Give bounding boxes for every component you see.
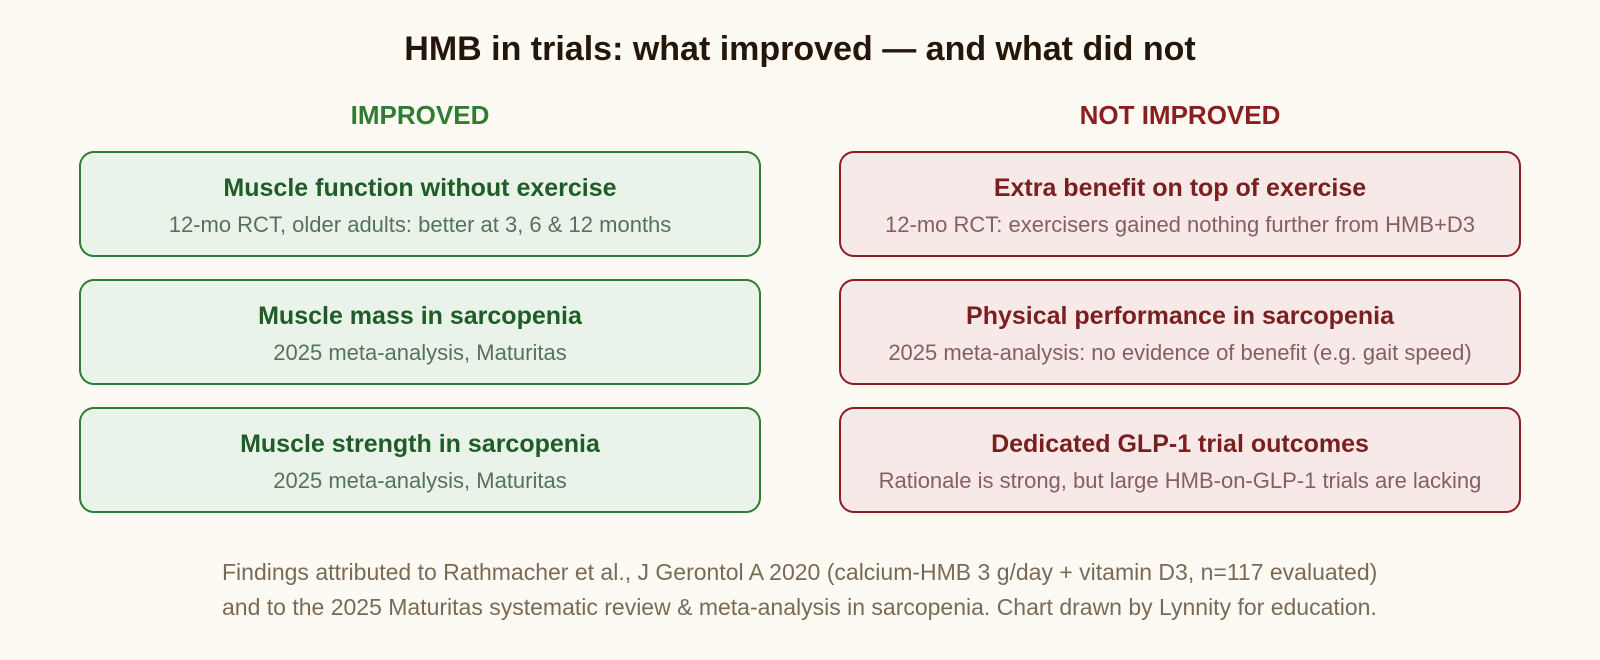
panel: dedicated GLP-1 trial outcomes: Dedicated GLP-1 trial outcomes: [991, 430, 1369, 458]
panel: dedicated GLP-1 trial outcomes: [840, 408, 1520, 512]
panel: muscle strength in sarcopenia: [80, 408, 760, 512]
panel: muscle strength in sarcopenia: Muscle strength in sarcopenia: [240, 430, 601, 458]
panel: extra benefit on top of exercise: [840, 152, 1520, 256]
panel: extra benefit on top of exercise: 12-mo RCT: exercisers gained nothing further from HMB+D3: [885, 212, 1475, 237]
panel: physical performance in sarcopenia: 2025 meta-analysis: no evidence of benefit (e.g. gait speed): [888, 340, 1472, 365]
panel: muscle mass in sarcopenia: Muscle mass in sarcopenia: [258, 302, 583, 330]
column heading: improved: IMPROVED: [351, 100, 489, 130]
panel: physical performance in sarcopenia: [840, 280, 1520, 384]
panel: muscle function without exercise: Muscle function without exercise: [223, 174, 617, 202]
footnote: and to the 2025 Maturitas systematic review & meta-analysis in sarcopenia. Chart drawn by Lynnity for education.: [222, 594, 1377, 620]
footnote: [222, 559, 1377, 620]
footnote: Findings attributed to Rathmacher et al., J Gerontol A 2020 (calcium-HMB 3 g/day + vitamin D3, n=117 evaluated): [222, 559, 1377, 585]
column heading: not improved: NOT IMPROVED: [1080, 100, 1280, 130]
title: HMB in trials: what improved — and what did not: [404, 30, 1196, 68]
panel: physical performance in sarcopenia: Physical performance in sarcopenia: [966, 302, 1395, 330]
panel: dedicated GLP-1 trial outcomes: Rationale is strong, but large HMB-on-GLP-1 trials are lacking: [879, 468, 1481, 493]
panel: extra benefit on top of exercise: Extra benefit on top of exercise: [994, 174, 1366, 202]
panel: muscle mass in sarcopenia: 2025 meta-analysis, Maturitas: [273, 340, 567, 365]
panel: muscle mass in sarcopenia: [80, 280, 760, 384]
panel: muscle function without exercise: 12-mo RCT, older adults: better at 3, 6 & 12 months: [169, 212, 671, 237]
panel: muscle function without exercise: [80, 152, 760, 256]
panel: muscle strength in sarcopenia: 2025 meta-analysis, Maturitas: [273, 468, 567, 493]
